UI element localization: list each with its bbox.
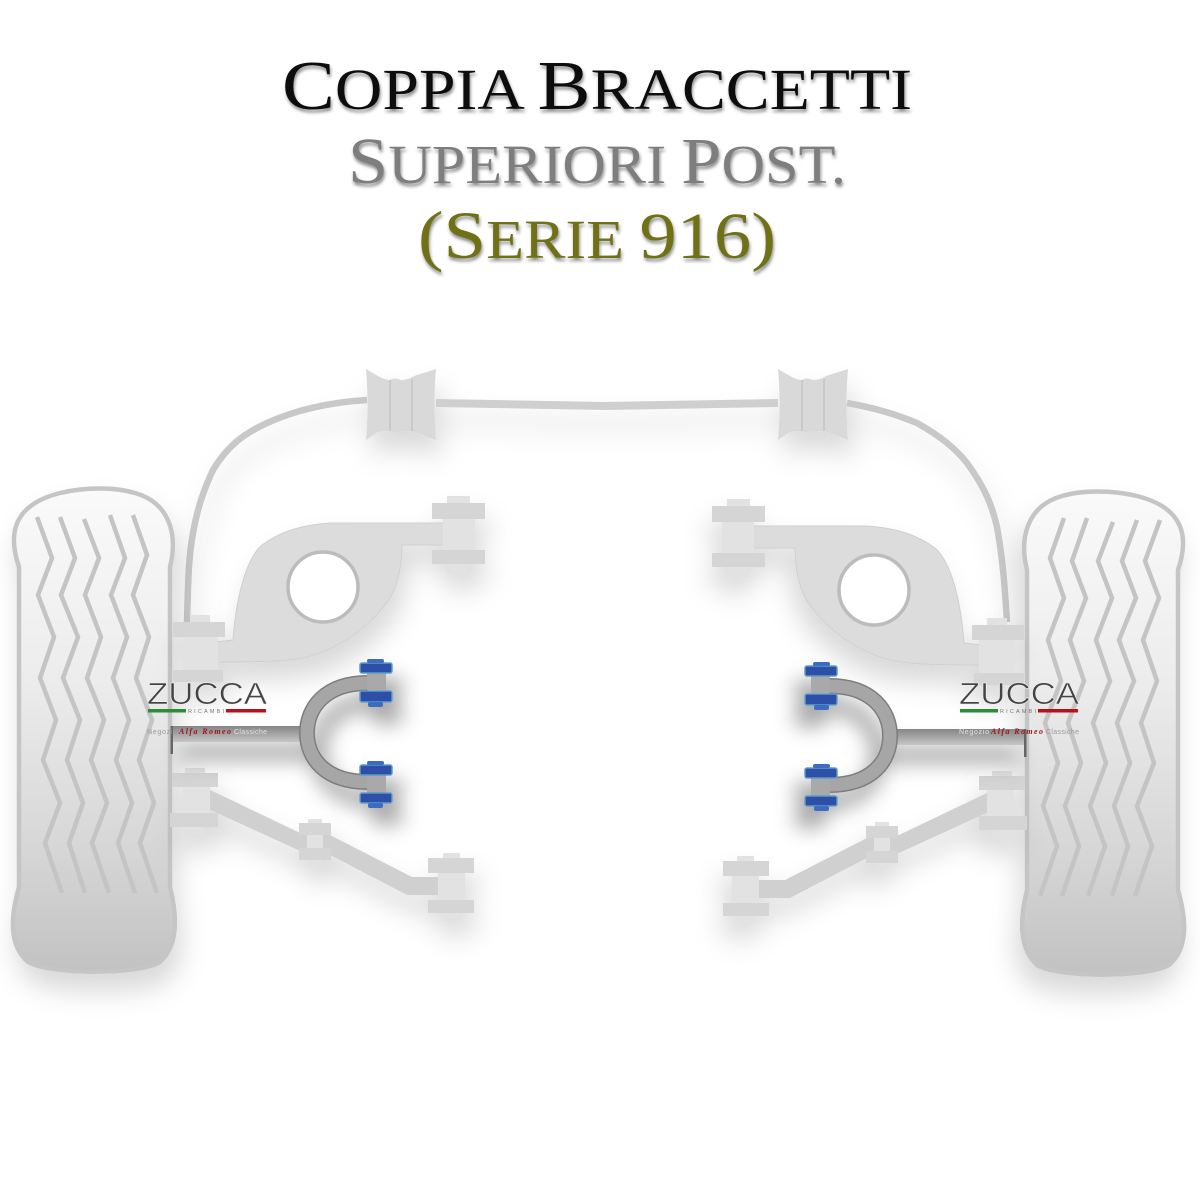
logo: Zucca Ricambi right: ZUCCA [959,676,1079,711]
bushing: sway bar right [778,369,848,440]
logo: Zucca Ricambi left: RICAMBI [188,709,224,715]
logo: Zucca Ricambi left [147,676,267,736]
left suspension assembly [13,488,485,972]
heading: Coppia Braccetti: COPPIA BRACCETTI [282,48,912,125]
logo: Zucca Ricambi left: ZUCCA [147,676,267,711]
logo: Zucca Ricambi left: Classiche [234,729,267,736]
heading: Superiori Post.: SUPERIORI POST. [348,125,846,198]
logo: Zucca Ricambi left: Alfa Romeo [178,727,231,736]
logo: Zucca Ricambi right: Alfa Romeo [990,727,1043,736]
logo: Zucca Ricambi right: Negozio [959,729,989,736]
heading: (Serie 916): (SERIE 916) [418,197,776,273]
title [282,48,912,273]
bushing: sway bar left [366,369,436,440]
sway bar [187,369,1007,622]
right suspension assembly [712,492,1184,975]
logo: Zucca Ricambi right: Classiche [1046,729,1079,736]
logo: Zucca Ricambi left: Negozio [147,729,177,736]
logo: Zucca Ricambi right [959,676,1079,736]
logo: Zucca Ricambi right: RICAMBI [1000,709,1036,715]
